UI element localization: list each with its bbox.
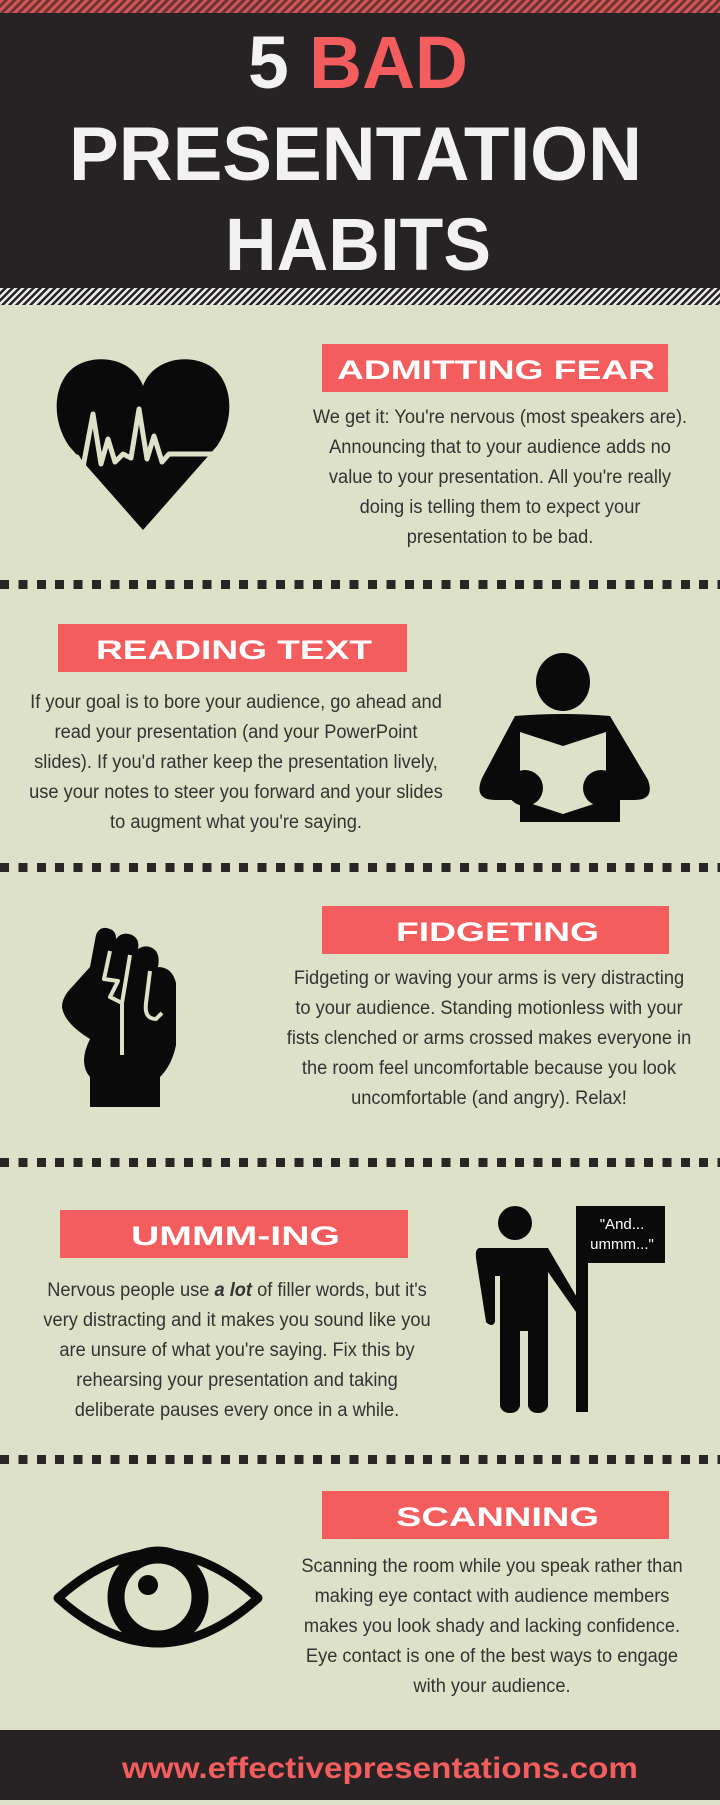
label: fidgeting	[322, 906, 669, 954]
icon: person with sign: ummm..."	[590, 1236, 654, 1253]
text: reading text: to augment what you're saying.	[110, 812, 362, 833]
label: ummm-ing: UMMM-ING	[131, 1221, 340, 1251]
text: ummm-ing	[43, 1280, 431, 1421]
text: scanning	[301, 1556, 683, 1697]
icon: eye	[54, 1546, 262, 1648]
text: admitting fear: Announcing that to your audience adds no	[329, 437, 671, 458]
label: admitting fear: ADMITTING FEAR	[337, 355, 655, 385]
text: scanning: Scanning the room while you speak rather than	[301, 1556, 683, 1577]
text: ummm-ing: are unsure of what you're saying. Fix this by	[59, 1340, 415, 1361]
text: admitting fear	[313, 407, 687, 548]
text: reading text: use your notes to steer you forward and your slides	[29, 782, 443, 803]
hatch strip	[0, 288, 720, 305]
section: fidgeting	[62, 906, 691, 1109]
label: scanning: SCANNING	[396, 1502, 599, 1532]
footer url: www.effectivepresentations.com	[121, 1752, 638, 1785]
icon: person with sign	[476, 1206, 665, 1413]
text: scanning: with your audience.	[413, 1676, 571, 1697]
section: umming	[43, 1206, 665, 1421]
label: scanning	[322, 1491, 669, 1539]
title: 5 BAD	[248, 21, 468, 104]
text: ummm-ing: Nervous people use a lot of filler words, but it's	[47, 1280, 427, 1301]
text: scanning: making eye contact with audience members	[315, 1586, 669, 1607]
text: fidgeting	[287, 968, 691, 1109]
header band	[0, 0, 720, 305]
text: scanning: Eye contact is one of the best ways to engage	[306, 1646, 678, 1667]
icon: fist	[62, 928, 176, 1107]
text: fidgeting: Fidgeting or waving your arms is very distracting	[294, 968, 684, 989]
text: admitting fear: We get it: You're nervous (most speakers are).	[313, 407, 687, 428]
text: fidgeting: fists clenched or arms crossed makes everyone in	[287, 1028, 691, 1049]
section: scanning	[54, 1491, 683, 1697]
title: HABITS	[225, 203, 491, 286]
text: admitting fear: presentation to be bad.	[407, 527, 593, 548]
text: scanning: makes you look shady and lacking confidence.	[304, 1616, 680, 1637]
icon: person with sign: "And...	[600, 1216, 644, 1233]
text: reading text: read your presentation (and your PowerPoint	[54, 722, 417, 743]
text: ummm-ing: very distracting and it makes you sound like you	[43, 1310, 431, 1331]
text: fidgeting: to your audience. Standing motionless with your	[295, 998, 683, 1019]
text: ummm-ing: deliberate pauses every once in a while.	[75, 1400, 399, 1421]
label: admitting fear	[322, 344, 668, 392]
label: reading text	[58, 624, 407, 672]
footer	[0, 1730, 720, 1800]
icon: heart	[56, 359, 230, 530]
label: ummm-ing	[60, 1210, 408, 1258]
section: reading text	[29, 624, 650, 833]
icon: reader	[479, 653, 650, 822]
label: fidgeting: FIDGETING	[396, 917, 599, 947]
title: PRESENTATION	[69, 112, 642, 197]
text: fidgeting: the room feel uncomfortable because you look	[302, 1058, 676, 1079]
text: admitting fear: value to your presentation. All you're really	[329, 467, 671, 488]
text: reading text	[29, 692, 443, 833]
text: reading text: If your goal is to bore your audience, go ahead and	[30, 692, 442, 713]
text: admitting fear: doing is telling them to expect your	[360, 497, 640, 518]
title	[69, 21, 642, 286]
section: admitting fear	[56, 344, 687, 548]
text: fidgeting: uncomfortable (and angry). Relax!	[351, 1088, 627, 1109]
text: reading text: slides). If you'd rather keep the presentation lively,	[34, 752, 438, 773]
label: reading text: READING TEXT	[96, 635, 373, 665]
text: ummm-ing: rehearsing your presentation and taking	[76, 1370, 398, 1391]
top stripe	[0, 0, 720, 13]
